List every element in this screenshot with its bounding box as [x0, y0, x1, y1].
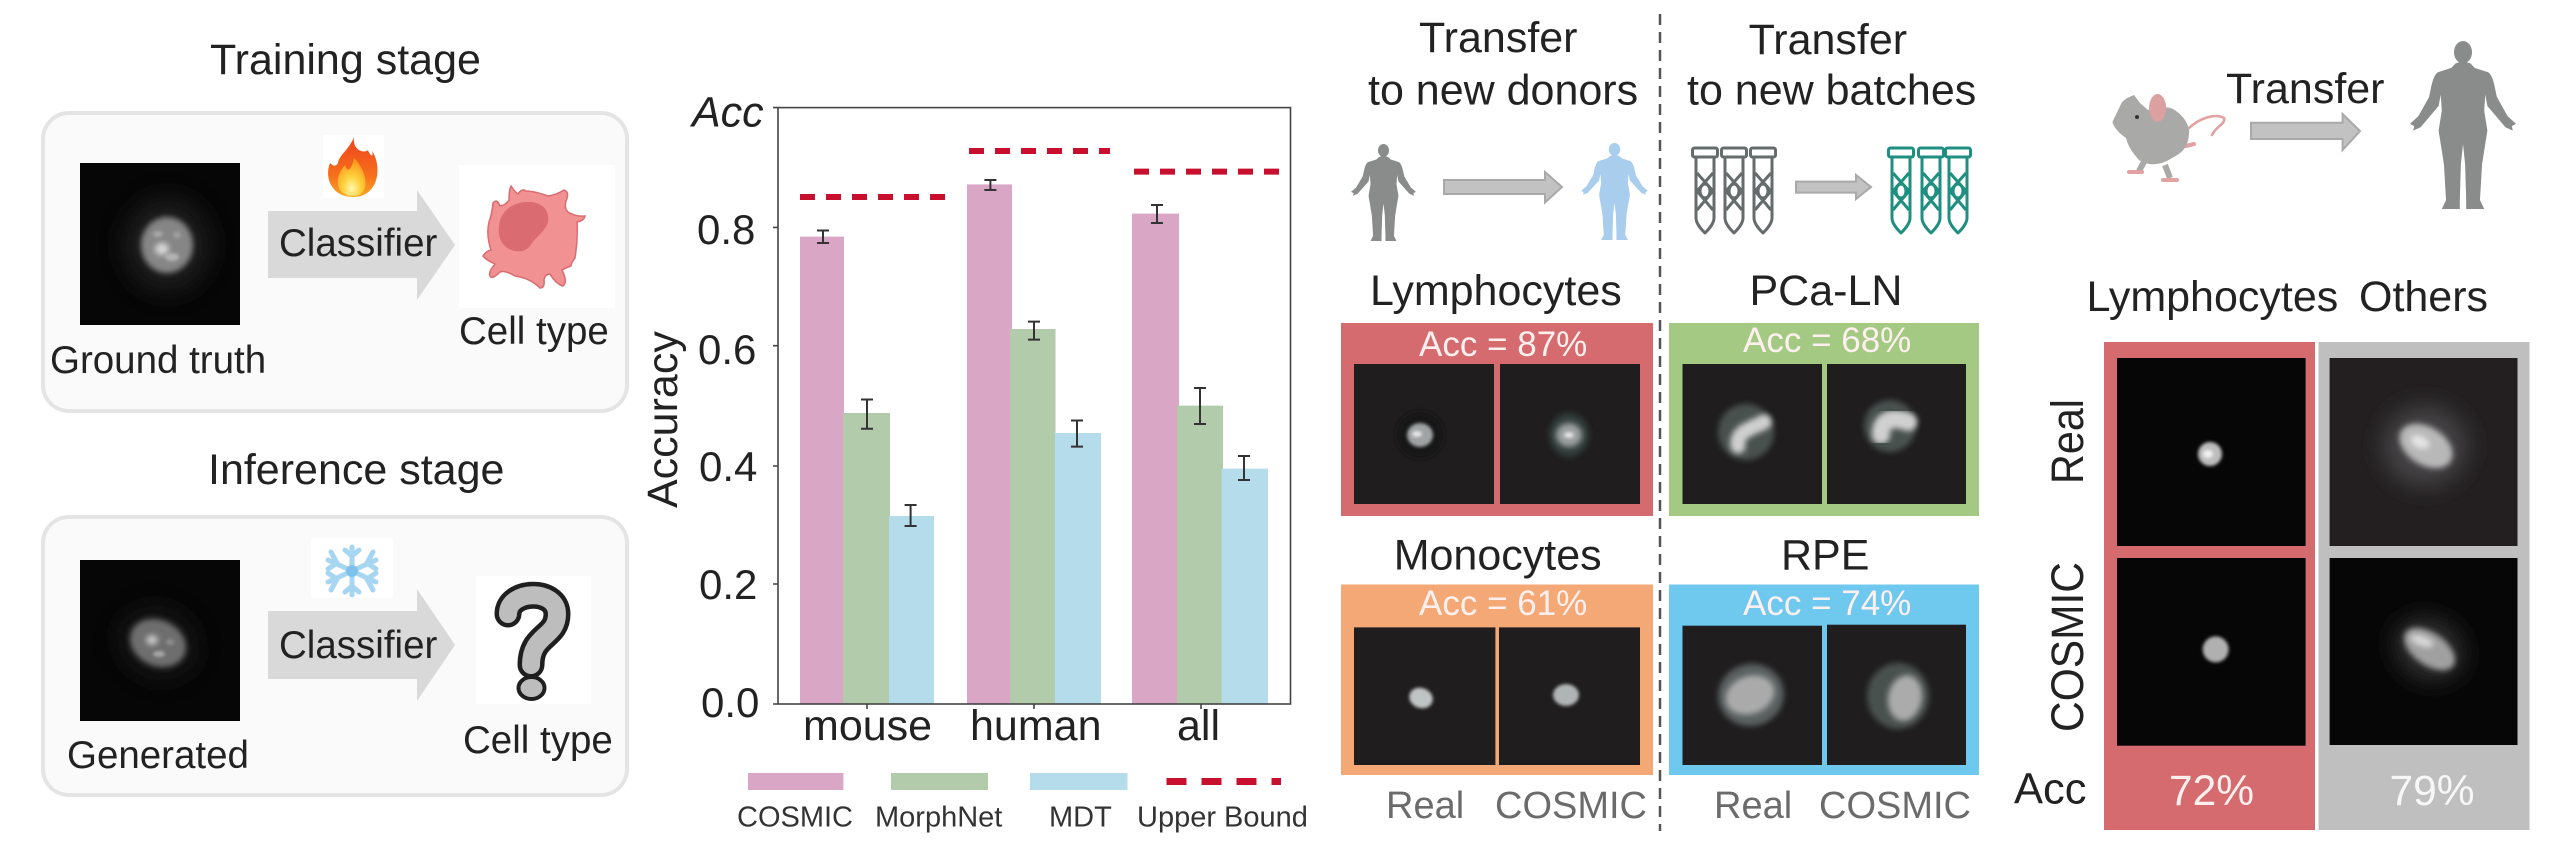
accuracy: 79%: 79% [2390, 768, 2475, 815]
panel: mouse to human transfer [2112, 41, 2516, 209]
red frame [1341, 323, 1653, 516]
accuracy: 61%: Acc = 61% [1419, 584, 1587, 623]
label: ground truth: Ground truth [50, 339, 266, 382]
image: ground truth cell [80, 163, 240, 325]
image: COSMIC RPE [1827, 625, 1966, 765]
icon: question mark [476, 576, 591, 704]
heading: transfer to new batches [1687, 16, 1976, 115]
labels: real and COSMIC columns: Real [1386, 785, 1464, 827]
bars: all [1132, 214, 1268, 704]
y-axis tick labels: 0.2 [699, 561, 757, 608]
label: generated: Generated [67, 734, 249, 777]
heading: transfer to new batches: to new batches [1687, 67, 1976, 115]
arrow: classifier [268, 190, 455, 300]
arrow: classifier: Classifier [279, 222, 437, 265]
icon: grey tubes [1692, 148, 1776, 233]
panel: PCa-LN batches [1669, 267, 1979, 516]
red column [2104, 342, 2315, 830]
chart: accuracy bar chart [639, 89, 1308, 834]
image: real lymphocyte [1354, 364, 1494, 504]
icon: blue human [1581, 143, 1648, 240]
card background [43, 517, 627, 795]
heading: lymphocytes: Lymphocytes [1370, 267, 1622, 315]
image: real other cell [2330, 358, 2518, 546]
label: transfer: Transfer [2226, 65, 2384, 113]
bars: mouse [800, 237, 934, 704]
green frame [1669, 323, 1979, 516]
accuracy: 74%: Acc = 74% [1743, 584, 1911, 623]
image: COSMIC monocyte [1499, 627, 1640, 765]
icon: snowflake [311, 538, 393, 598]
label: Acc: Acc [689, 89, 764, 137]
arrow: classifier: Classifier [279, 624, 437, 667]
icon: cell [459, 165, 615, 308]
heading: transfer to new batches: Transfer [1749, 16, 1907, 64]
bars: human [967, 184, 1101, 704]
legend: Upper Bound [1137, 802, 1308, 834]
icon: teal tubes [1888, 148, 1970, 233]
y-axis title: Accuracy [639, 331, 687, 508]
column heading: others: Others [2359, 273, 2488, 321]
upper bound dashed lines [800, 151, 1280, 197]
divider: dashed vertical line [1659, 14, 1661, 831]
icon: human [2410, 41, 2516, 209]
labels: real and COSMIC columns: COSMIC [1819, 785, 1971, 827]
legend [737, 773, 1308, 834]
grey column [2318, 342, 2530, 830]
image: real PCa-LN [1682, 364, 1822, 504]
image: real monocyte [1354, 627, 1495, 765]
panel: monocytes donors [1341, 532, 1653, 775]
x-axis labels: human [970, 702, 1101, 750]
label: cell type: Cell type [463, 719, 613, 762]
icon: grey human [1351, 144, 1416, 241]
heading: RPE: RPE [1781, 532, 1869, 580]
row label: real: Real [2042, 399, 2093, 484]
heading: monocytes: Monocytes [1394, 532, 1602, 580]
panel: transfer to new donors header [1351, 14, 1648, 241]
image: COSMIC lymphocyte [2117, 558, 2306, 746]
image: generated cell [80, 560, 240, 721]
arrow: batch transfer [1796, 175, 1871, 199]
orange frame [1341, 584, 1653, 775]
labels: real and COSMIC columns: Real [1714, 785, 1792, 827]
heading: transfer to new donors: to new donors [1368, 67, 1638, 115]
panel: lymphocytes donors [1341, 267, 1653, 516]
heading: transfer to new donors: Transfer [1419, 14, 1578, 62]
y-axis tick labels [697, 206, 759, 726]
row label: Acc: Acc [2014, 766, 2087, 814]
panel: training stage [43, 36, 627, 411]
panel: transfer to new batches header [1687, 16, 1976, 233]
accuracy: 72%: 72% [2169, 768, 2254, 815]
y-axis tick labels: 0.4 [699, 443, 757, 490]
image: real RPE [1682, 626, 1822, 765]
panel: RPE batches [1669, 532, 1979, 775]
heading: inference stage: Inference stage [208, 446, 504, 494]
labels: real and COSMIC columns: COSMIC [1495, 785, 1647, 827]
legend: MDT [1049, 802, 1112, 834]
arrow: donor transfer [1444, 172, 1562, 202]
image: COSMIC other cell [2330, 558, 2518, 745]
legend: MorphNet [875, 802, 1002, 834]
image: real lymphocyte [2117, 358, 2306, 546]
y-axis tick labels: 0.0 [701, 679, 759, 726]
card background [43, 113, 627, 411]
error bars [817, 180, 1250, 526]
label: cell type: Cell type [459, 310, 609, 353]
icon: flame [323, 135, 384, 198]
heading: training stage: Training stage [210, 36, 481, 84]
accuracy: 87%: Acc = 87% [1419, 325, 1587, 364]
panel: lymphocytes vs others comparison [2014, 273, 2530, 830]
arrow: classifier [268, 589, 455, 701]
y-axis tick labels: 0.8 [697, 206, 755, 253]
axes frame and ticks [773, 108, 1290, 709]
image: COSMIC PCa-LN [1827, 364, 1966, 504]
legend: COSMIC [737, 802, 853, 834]
heading: PCa-LN: PCa-LN [1750, 267, 1902, 315]
y-axis tick labels: 0.6 [698, 326, 756, 373]
arrow: mouse to human [2251, 114, 2360, 150]
icon: mouse [2112, 94, 2224, 180]
column heading: lymphocytes: Lymphocytes [2086, 273, 2338, 321]
labels: real and COSMIC columns [1386, 785, 1971, 827]
heading: transfer to new donors [1368, 14, 1638, 115]
panel: inference stage [43, 446, 627, 795]
blue frame [1669, 584, 1979, 775]
x-axis labels: mouse [803, 702, 932, 750]
row label: COSMIC: COSMIC [2042, 562, 2093, 732]
x-axis labels [803, 702, 1220, 750]
x-axis labels: all [1177, 702, 1220, 750]
accuracy: 68%: Acc = 68% [1743, 321, 1911, 360]
image: COSMIC lymphocyte [1500, 364, 1640, 504]
